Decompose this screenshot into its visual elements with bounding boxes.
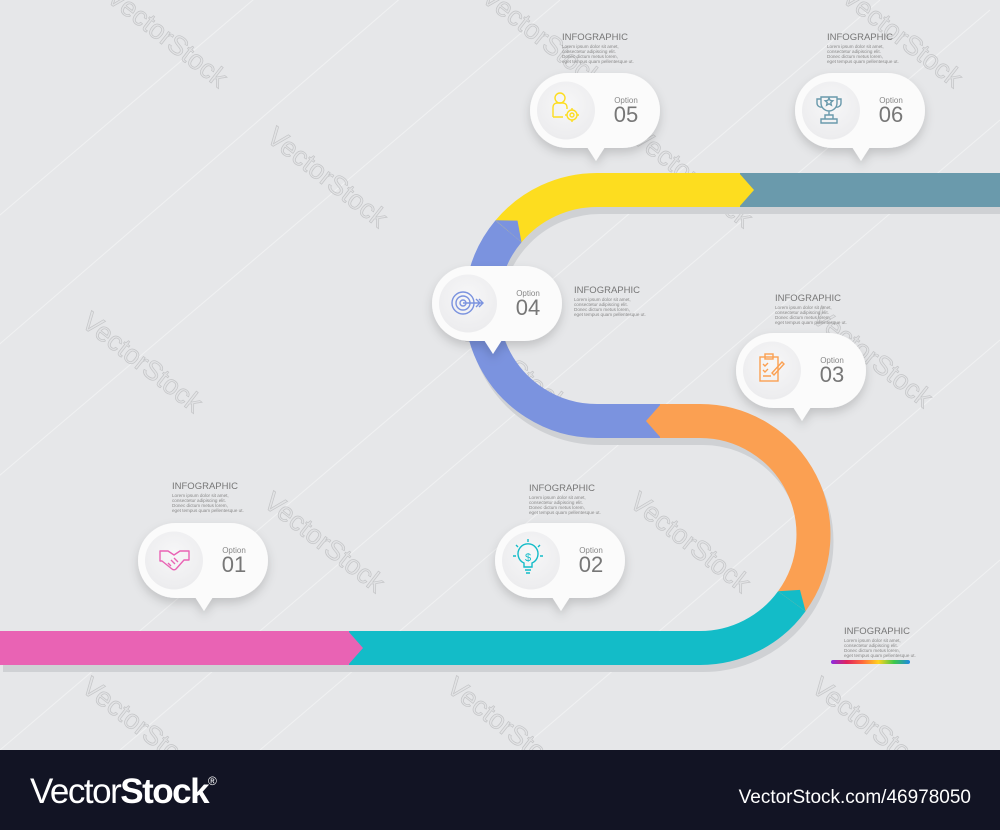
callout 01: Option <box>222 546 246 555</box>
text block 04 <box>574 285 646 317</box>
watermarks: VectorStock <box>626 121 759 234</box>
text block 03: Donec dictum metus lorem, <box>775 315 831 320</box>
text block 02 <box>529 483 601 515</box>
watermarks: VectorStock <box>806 301 939 414</box>
callout 02: 02 <box>579 552 603 577</box>
text block 03 <box>775 293 847 325</box>
text block 03: Lorem ipsum dolor sit amet, <box>775 305 832 310</box>
road path <box>0 173 1000 665</box>
callout 03 <box>736 333 866 421</box>
callout 03: Option <box>820 356 844 365</box>
icon: handshake <box>160 551 189 570</box>
footer bar: VectorStock.com/46978050 <box>739 787 971 808</box>
callout 05: Option <box>614 96 638 105</box>
text block 02: Donec dictum metus lorem, <box>529 505 585 510</box>
text block 01: Lorem ipsum dolor sit amet, <box>172 493 229 498</box>
text block 02: INFOGRAPHIC <box>529 483 595 494</box>
callout 04: 04 <box>516 295 540 320</box>
callout 02: Option <box>579 546 603 555</box>
footer bar: ® <box>208 774 217 788</box>
callout 05 <box>530 73 660 161</box>
text block 05: INFOGRAPHIC <box>562 32 628 43</box>
watermarks: VectorStock <box>258 486 391 599</box>
footer bar: VectorStock <box>30 772 208 811</box>
text block 01: eget tempus quam pellentesque ut. <box>172 508 244 513</box>
text block 06: INFOGRAPHIC <box>827 32 893 43</box>
text block 03: consectetur adipiscing elit. <box>775 310 829 315</box>
callout 04: Option <box>516 289 540 298</box>
callout 06: Option <box>879 96 903 105</box>
text block 06 <box>827 32 899 64</box>
icon: target <box>452 292 483 314</box>
legend block with rainbow bar: INFOGRAPHIC <box>844 626 910 637</box>
text block 01: INFOGRAPHIC <box>172 481 238 492</box>
watermarks: VectorStock <box>441 306 574 419</box>
text block 04: Lorem ipsum dolor sit amet, <box>574 297 631 302</box>
text block 05: consectetur adipiscing elit. <box>562 49 616 54</box>
text block 05: eget tempus quam pellentesque ut. <box>562 59 634 64</box>
footer bar <box>0 750 1000 830</box>
watermarks: VectorStock <box>806 671 939 784</box>
text block 04: INFOGRAPHIC <box>574 285 640 296</box>
text block 06: consectetur adipiscing elit. <box>827 49 881 54</box>
text block 04: Donec dictum metus lorem, <box>574 307 630 312</box>
text block 01: consectetur adipiscing elit. <box>172 498 226 503</box>
callout 06 <box>795 73 925 161</box>
legend block with rainbow bar: Lorem ipsum dolor sit amet, <box>844 638 901 643</box>
text block 05: Donec dictum metus lorem, <box>562 54 618 59</box>
watermarks: VectorStock <box>624 486 757 599</box>
watermarks: VectorStock <box>76 306 209 419</box>
legend block with rainbow bar: eget tempus quam pellentesque ut. <box>844 653 916 658</box>
callout 01: 01 <box>222 552 246 577</box>
callout 04 <box>432 266 562 354</box>
watermarks: VectorStock <box>76 671 209 784</box>
text block 06: eget tempus quam pellentesque ut. <box>827 59 899 64</box>
text block 05: Lorem ipsum dolor sit amet, <box>562 44 619 49</box>
text block 05 <box>562 32 634 64</box>
text block 03: eget tempus quam pellentesque ut. <box>775 320 847 325</box>
callout 02 <box>495 523 625 611</box>
callout 05: 05 <box>614 102 638 127</box>
text block 04: consectetur adipiscing elit. <box>574 302 628 307</box>
text block 01: Donec dictum metus lorem, <box>172 503 228 508</box>
text block 02: eget tempus quam pellentesque ut. <box>529 510 601 515</box>
legend block with rainbow bar: consectetur adipiscing elit. <box>844 643 898 648</box>
callout 03: 03 <box>820 362 844 387</box>
text block 01 <box>172 481 244 513</box>
text block 04: eget tempus quam pellentesque ut. <box>574 312 646 317</box>
callout 06: 06 <box>879 102 903 127</box>
watermarks: VectorStock <box>261 121 394 234</box>
text block 02: consectetur adipiscing elit. <box>529 500 583 505</box>
legend block with rainbow bar: Donec dictum metus lorem, <box>844 648 900 653</box>
icon: trophy <box>817 97 841 123</box>
icon: user gear <box>553 93 579 122</box>
text block 06: Donec dictum metus lorem, <box>827 54 883 59</box>
icon: bulb dollar: $ <box>525 552 531 564</box>
text block 02: Lorem ipsum dolor sit amet, <box>529 495 586 500</box>
text block 06: Lorem ipsum dolor sit amet, <box>827 44 884 49</box>
callout 01 <box>138 523 268 611</box>
text block 03: INFOGRAPHIC <box>775 293 841 304</box>
legend block with rainbow bar <box>831 626 916 664</box>
watermarks: VectorStock <box>441 671 574 784</box>
icon: clipboard <box>760 354 784 381</box>
